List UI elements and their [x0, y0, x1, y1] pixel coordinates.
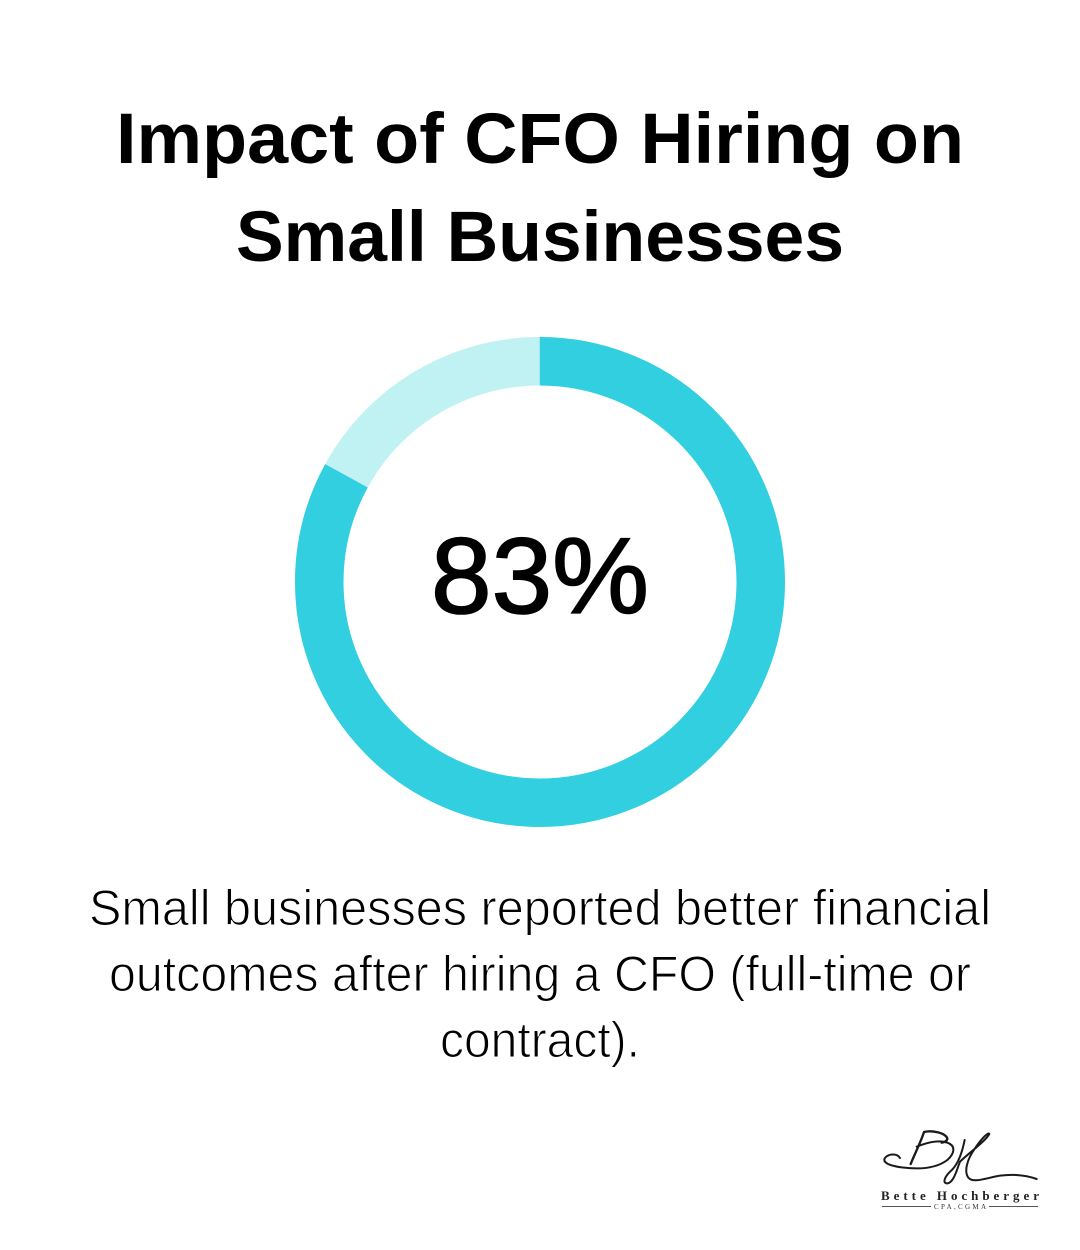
description text: [89, 880, 991, 1068]
donut chart: 83%: [319, 361, 761, 803]
title: Small Businesses: [236, 198, 844, 277]
description text: Small businesses reported better financial: [89, 880, 991, 936]
logo: Bette Hochberger: [881, 1131, 1039, 1211]
title: [116, 100, 964, 277]
logo name: Bette Hochberger: [881, 1188, 1039, 1203]
logo credentials: CPA,CGMA: [934, 1203, 986, 1211]
donut value arc: [319, 361, 761, 803]
description text: outcomes after hiring a CFO (full-time or: [109, 946, 971, 1002]
donut track: [319, 361, 761, 803]
title: Impact of CFO Hiring on: [116, 100, 964, 179]
donut value label: 83%: [431, 515, 649, 636]
logo signature monogram: [884, 1131, 1037, 1183]
description text: contract).: [440, 1012, 640, 1068]
